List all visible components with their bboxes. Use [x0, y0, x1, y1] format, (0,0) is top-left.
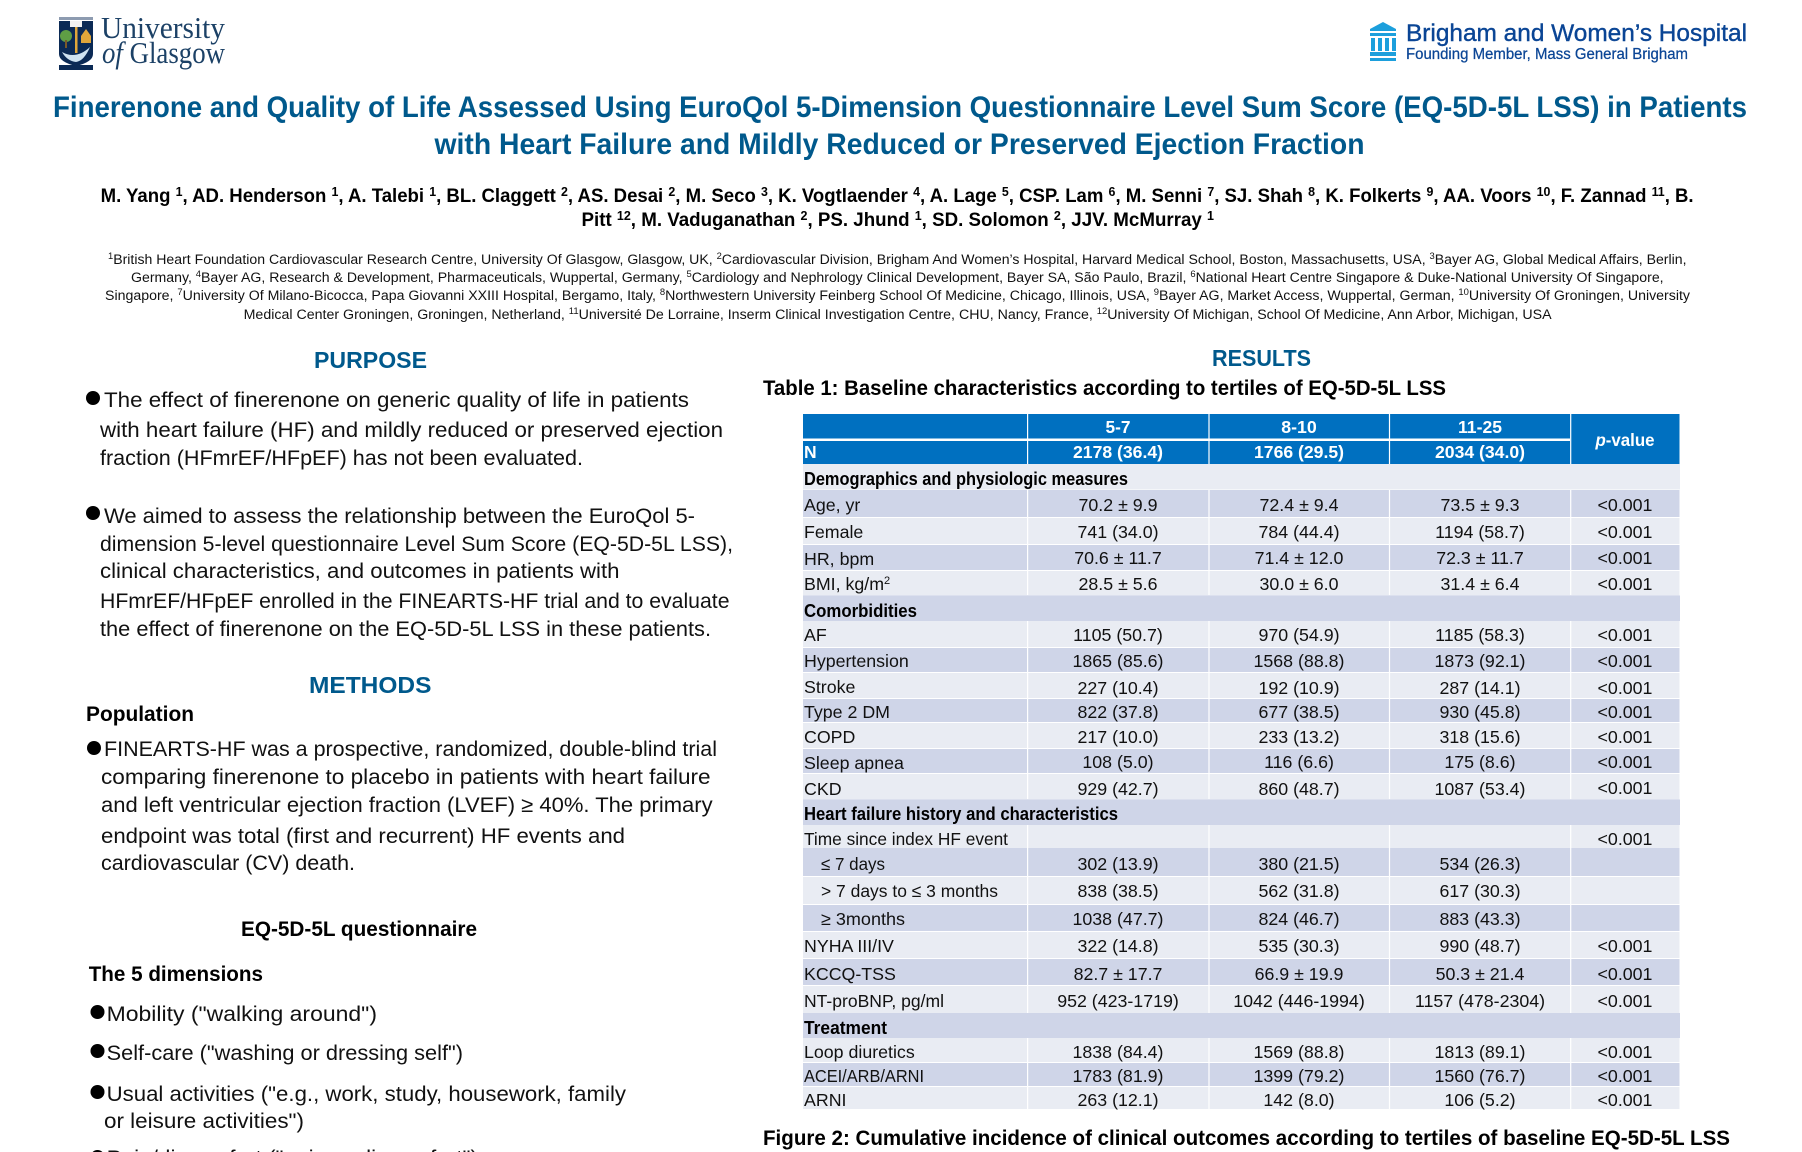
- subheading: the 5 dimensions: The 5 dimensions: [89, 963, 263, 986]
- table header: 1766 (29.5): [1254, 442, 1344, 462]
- affiliations: Université De Lorraine, Inserm Clinical Investigation Centre, CHU, Nancy, France,: [579, 307, 1097, 322]
- authors: M. Yang: [101, 185, 174, 207]
- section: comorbidities: <0.001: [1598, 625, 1653, 645]
- section: treatment: [804, 1018, 1653, 1110]
- section: heart failure history and characteristics: 838 (38.5): [1077, 881, 1159, 901]
- authors: , AD. Henderson: [183, 185, 331, 207]
- authors: 4: [913, 184, 921, 199]
- section: heart failure history and characteristics: ≤ 7 days: [821, 854, 885, 874]
- section: heart failure history and characteristics: 883 (43.3): [1439, 909, 1521, 929]
- authors: , SD. Solomon: [922, 209, 1054, 231]
- authors: 9: [1427, 184, 1433, 199]
- authors: [101, 184, 1694, 231]
- bullet: purpose 1: The effect of finerenone on generic quality of life in patients: [104, 388, 689, 412]
- affiliations: Northwestern University Feinberg School Of Medicine, Chicago, Illinois, USA,: [665, 288, 1154, 303]
- section: demographics and physiologic measures: <0.001: [1598, 548, 1653, 568]
- subheading: EQ-5D-5L questionnaire: EQ-5D-5L questionnaire: [241, 918, 477, 941]
- section: heart failure history and characteristics: NT-proBNP, pg/ml: [804, 991, 944, 1011]
- section: heart failure history and characteristics: Time since index HF event: [804, 829, 1008, 849]
- section: demographics and physiologic measures: <0.001: [1598, 495, 1653, 515]
- authors: 10: [1537, 184, 1550, 199]
- section: heart failure history and characteristics: 66.9 ± 19.9: [1255, 964, 1344, 984]
- logo: Brigham and Women's Hospital: [1370, 20, 1747, 63]
- affiliations: Germany,: [131, 270, 189, 285]
- section: demographics and physiologic measures: 31.4 ± 6.4: [1441, 574, 1520, 594]
- affiliations: 9: [1154, 287, 1159, 297]
- bullet: purpose 2: dimension 5-level questionnaire Level Sum Score (EQ-5D-5L LSS),: [100, 532, 733, 556]
- section: comorbidities: 822 (37.8): [1077, 702, 1159, 722]
- authors: , A. Talebi: [338, 185, 429, 207]
- table header: [803, 414, 1680, 464]
- authors: 6: [1109, 184, 1115, 199]
- authors: , M. Vaduganathan: [631, 209, 801, 231]
- subheading: population: Population: [86, 703, 194, 726]
- section: treatment: 142 (8.0): [1263, 1090, 1335, 1110]
- bullet: purpose 2: HFmrEF/HFpEF enrolled in the FINEARTS-HF trial and to evaluate: [100, 589, 730, 613]
- section: comorbidities: 227 (10.4): [1077, 678, 1159, 698]
- affiliations: National Heart Centre Singapore & Duke-National University Of Singapore,: [1196, 270, 1664, 285]
- section: treatment: 1560 (76.7): [1435, 1066, 1525, 1086]
- section: comorbidities: 287 (14.1): [1439, 678, 1521, 698]
- icon: hospital columns: [1370, 22, 1396, 61]
- section: heart failure history and characteristics: > 7 days to ≤ 3 months: [821, 881, 998, 901]
- table header: 8-10: [1281, 417, 1317, 437]
- section: treatment: 1813 (89.1): [1435, 1042, 1525, 1062]
- authors: , K. Vogtlaender: [768, 185, 913, 207]
- figure 2 caption: Figure 2: Cumulative incidence of clinical outcomes according to tertiles of baseline EQ-5D-5L LSS: [763, 1127, 1730, 1150]
- section: comorbidities: 1865 (85.6): [1073, 651, 1163, 671]
- section: heart failure history and characteristics: 1042 (446-1994): [1233, 991, 1365, 1011]
- section: treatment: 263 (12.1): [1077, 1090, 1159, 1110]
- authors: , SJ. Shah: [1214, 185, 1308, 207]
- section: treatment: 1569 (88.8): [1254, 1042, 1344, 1062]
- bullet: population: endpoint was total (first and recurrent) HF events and: [101, 824, 625, 848]
- table header: 5-7: [1106, 417, 1130, 437]
- section: demographics and physiologic measures: [804, 469, 1653, 594]
- section: comorbidities: <0.001: [1598, 778, 1653, 798]
- wordmark: University: [101, 10, 225, 45]
- table: baseline characteristics: [803, 414, 1680, 1110]
- title: with Heart Failure and Mildly Reduced or Preserved Ejection Fraction: [434, 128, 1364, 161]
- list: dimensions: Usual activities ("e.g., work, study, housework, family: [107, 1082, 626, 1106]
- bullet: population: cardiovascular (CV) death.: [101, 851, 355, 875]
- authors: 12: [617, 208, 631, 223]
- heading: methods: METHODS: [309, 672, 431, 698]
- authors: 8: [1308, 184, 1315, 199]
- section: comorbidities: Stroke: [804, 677, 856, 697]
- section: heart failure history and characteristics: 1157 (478-2304): [1415, 991, 1545, 1011]
- affiliations: 10: [1458, 287, 1469, 297]
- section: demographics and physiologic measures: Demographics and physiologic measures: [804, 469, 1128, 489]
- bullet: population: comparing finerenone to placebo in patients with heart failure: [101, 765, 711, 789]
- authors: , PS. Jhund: [807, 209, 915, 231]
- section: heart failure history and characteristics: NYHA III/IV: [804, 936, 894, 956]
- affiliations: [105, 251, 1690, 322]
- section: heart failure history and characteristics: <0.001: [1598, 936, 1653, 956]
- section: demographics and physiologic measures: 72.3 ± 11.7: [1436, 548, 1524, 568]
- heading: results: RESULTS: [1212, 345, 1311, 371]
- affiliations: Medical Center Groningen, Groningen, Netherland,: [244, 307, 549, 322]
- panel: purpose: [86, 347, 733, 641]
- authors: , M. Seco: [675, 185, 761, 207]
- row backgrounds: [803, 414, 1680, 1109]
- section: demographics and physiologic measures: 70.6 ± 11.7: [1074, 548, 1162, 568]
- section: heart failure history and characteristics: ≥ 3months: [821, 909, 905, 929]
- affiliations: University Of Milano-Bicocca, Papa Giovanni XXIII Hospital, Bergamo, Italy,: [183, 288, 660, 303]
- section: demographics and physiologic measures: 1194 (58.7): [1435, 522, 1525, 542]
- authors: , AS. Desai: [568, 185, 668, 207]
- section: comorbidities: Sleep apnea: [804, 753, 904, 773]
- section: comorbidities: 860 (48.7): [1258, 779, 1340, 799]
- section: demographics and physiologic measures: Female: [804, 522, 863, 542]
- table header: 11-25: [1458, 417, 1502, 437]
- section: demographics and physiologic measures: 784 (44.4): [1258, 522, 1340, 542]
- section: heart failure history and characteristics: <0.001: [1598, 964, 1653, 984]
- section: heart failure history and characteristics: <0.001: [1598, 991, 1653, 1011]
- authors: 11: [1652, 184, 1665, 199]
- section: demographics and physiologic measures: 28.5 ± 5.6: [1079, 574, 1158, 594]
- section: comorbidities: Type 2 DM: [804, 702, 890, 722]
- section: comorbidities: 930 (45.8): [1439, 702, 1521, 722]
- authors: 2: [1054, 208, 1061, 223]
- list: dimensions: Self-care ("washing or dressing self"): [107, 1041, 463, 1065]
- section: treatment: 1783 (81.9): [1073, 1066, 1163, 1086]
- authors: 1: [429, 184, 436, 199]
- section: comorbidities: 233 (13.2): [1258, 727, 1340, 747]
- section: treatment: <0.001: [1598, 1090, 1653, 1110]
- bullet: purpose 1: fraction (HFmrEF/HFpEF) has not been evaluated.: [100, 446, 583, 470]
- section: comorbidities: CKD: [804, 779, 842, 799]
- section: comorbidities: 1105 (50.7): [1073, 625, 1163, 645]
- section: comorbidities: 175 (8.6): [1444, 752, 1516, 772]
- section: heart failure history and characteristics: 322 (14.8): [1077, 936, 1159, 956]
- section: treatment: <0.001: [1598, 1066, 1653, 1086]
- section: heart failure history and characteristics: 990 (48.7): [1439, 936, 1521, 956]
- authors: , CSP. Lam: [1009, 185, 1109, 207]
- section: demographics and physiologic measures: Age, yr: [804, 495, 860, 515]
- section: heart failure history and characteristics: 82.7 ± 17.7: [1074, 964, 1162, 984]
- logo: University of Glasgow: of Glasgow: [102, 35, 226, 70]
- section: demographics and physiologic measures: BMI, kg/m: [804, 574, 884, 594]
- authors: 7: [1207, 184, 1214, 199]
- authors: , K. Folkerts: [1315, 185, 1427, 207]
- section: comorbidities: <0.001: [1598, 678, 1653, 698]
- section: comorbidities: 217 (10.0): [1077, 727, 1159, 747]
- title: [53, 91, 1747, 161]
- affiliations: Bayer AG, Research & Development, Pharmaceuticals, Wuppertal, Germany,: [201, 270, 687, 285]
- bullet: purpose 2: clinical characteristics, and outcomes in patients with: [100, 559, 620, 583]
- section: heart failure history and characteristics: 1038 (47.7): [1073, 909, 1163, 929]
- authors: 1: [915, 208, 922, 223]
- section: comorbidities: <0.001: [1598, 651, 1653, 671]
- section: treatment: ACEI/ARB/ARNI: [804, 1066, 924, 1086]
- section: comorbidities: Hypertension: [804, 651, 909, 671]
- section: treatment: <0.001: [1598, 1042, 1653, 1062]
- section: heart failure history and characteristics: [804, 804, 1653, 1011]
- section: heart failure history and characteristics: 562 (31.8): [1258, 881, 1340, 901]
- panel: methods: [86, 672, 717, 1152]
- panel: results: [763, 345, 1730, 1150]
- authors: 5: [1002, 184, 1009, 199]
- section: demographics and physiologic measures: 2: [884, 575, 890, 587]
- section: heart failure history and characteristics: 302 (13.9): [1077, 854, 1159, 874]
- bullet: population: [87, 737, 717, 875]
- bullet: purpose 1: [86, 388, 723, 470]
- section: treatment: 1399 (79.2): [1254, 1066, 1344, 1086]
- section: treatment: ARNI: [804, 1090, 846, 1110]
- section: heart failure history and characteristics: Heart failure history and characteristics: [804, 804, 1118, 824]
- section: demographics and physiologic measures: <0.001: [1598, 574, 1653, 594]
- affiliations: 8: [660, 287, 665, 297]
- affiliations: 4: [196, 269, 201, 279]
- logo: Brigham and Women's Hospital: Founding Member, Mass General Brigham: [1406, 46, 1688, 63]
- authors: , F. Zannad: [1550, 185, 1652, 207]
- section: demographics and physiologic measures: 30.0 ± 6.0: [1260, 574, 1339, 594]
- heading: purpose: PURPOSE: [314, 347, 427, 373]
- table header: N: [804, 442, 817, 462]
- authors: , M. Senni: [1115, 185, 1207, 207]
- section: heart failure history and characteristics: 535 (30.3): [1258, 936, 1340, 956]
- section: comorbidities: <0.001: [1598, 702, 1653, 722]
- section: heart failure history and characteristics: 50.3 ± 21.4: [1436, 964, 1525, 984]
- section: treatment: Treatment: [804, 1018, 887, 1038]
- bullet: population: and left ventricular ejection fraction (LVEF) ≥ 40%. The primary: [101, 793, 713, 817]
- section: comorbidities: [804, 601, 1653, 799]
- authors: , JJV. McMurray: [1061, 209, 1207, 231]
- section: comorbidities: <0.001: [1598, 727, 1653, 747]
- table header: 2178 (36.4): [1073, 442, 1163, 462]
- section: treatment: Loop diuretics: [804, 1042, 915, 1062]
- table title: Table 1: Baseline characteristics according to tertiles of EQ-5D-5L LSS: [763, 377, 1446, 400]
- section: comorbidities: 1568 (88.8): [1254, 651, 1344, 671]
- authors: 1: [331, 184, 338, 199]
- bullet: purpose 1: with heart failure (HF) and mildly reduced or preserved ejection: [99, 418, 723, 442]
- affiliations: 11: [569, 306, 579, 316]
- affiliations: 1: [108, 251, 113, 261]
- section: heart failure history and characteristics: 824 (46.7): [1258, 909, 1340, 929]
- affiliations: University Of Groningen, University: [1469, 288, 1690, 303]
- affiliations: 2: [717, 251, 722, 261]
- section: demographics and physiologic measures: <0.001: [1598, 522, 1653, 542]
- table header: 2034 (34.0): [1435, 442, 1525, 462]
- section: heart failure history and characteristics: 380 (21.5): [1258, 854, 1340, 874]
- section: comorbidities: 1185 (58.3): [1435, 625, 1525, 645]
- section: comorbidities: 1873 (92.1): [1435, 651, 1525, 671]
- authors: 1: [176, 184, 183, 199]
- authors: 3: [761, 184, 768, 199]
- bullet: purpose 2: We aimed to assess the relationship between the EuroQol 5-: [104, 504, 695, 528]
- list: dimensions: or leisure activities"): [104, 1109, 304, 1133]
- affiliations: Singapore,: [105, 288, 170, 303]
- section: demographics and physiologic measures: HR, bpm: [804, 549, 874, 569]
- list: dimensions: Mobility ("walking around"): [107, 1002, 377, 1026]
- table header: p-value: [1595, 430, 1655, 450]
- section: demographics and physiologic measures: 73.5 ± 9.3: [1441, 495, 1520, 515]
- authors: , BL. Claggett: [436, 185, 561, 207]
- section: comorbidities: <0.001: [1598, 752, 1653, 772]
- section: comorbidities: COPD: [804, 727, 855, 747]
- section: comorbidities: AF: [804, 625, 827, 645]
- section: heart failure history and characteristics: <0.001: [1598, 829, 1653, 849]
- section: comorbidities: 116 (6.6): [1264, 752, 1334, 772]
- bullet: purpose 2: [86, 504, 733, 641]
- affiliations: Cardiology and Nephrology Clinical Development, Bayer SA, São Paulo, Brazil,: [692, 270, 1190, 285]
- authors: , B.: [1665, 185, 1694, 207]
- section: comorbidities: 929 (42.7): [1077, 779, 1159, 799]
- affiliations: Cardiovascular Division, Brigham And Women’s Hospital, Harvard Medical School, Boston, Massachusetts, USA,: [722, 252, 1430, 267]
- section: comorbidities: 1087 (53.4): [1435, 779, 1525, 799]
- affiliations: 3: [1430, 251, 1435, 261]
- bullet: purpose 2: the effect of finerenone on the EQ-5D-5L LSS in these patients.: [100, 617, 711, 641]
- section: treatment: 106 (5.2): [1444, 1090, 1516, 1110]
- section: comorbidities: 108 (5.0): [1082, 752, 1154, 772]
- authors: , A. Lage: [920, 185, 1002, 207]
- affiliations: Bayer AG, Global Medical Affairs, Berlin,: [1435, 252, 1686, 267]
- affiliations: British Heart Foundation Cardiovascular Research Centre, University Of Glasgow, Glasgow, UK,: [113, 252, 717, 267]
- authors: , AA. Voors: [1433, 185, 1537, 207]
- affiliations: University Of Michigan, School Of Medicine, Ann Arbor, Michigan, USA: [1107, 307, 1552, 322]
- list: dimensions: [90, 1002, 626, 1152]
- authors: 1: [1207, 208, 1214, 223]
- authors: 2: [668, 184, 675, 199]
- logo: University of Glasgow: [59, 10, 226, 70]
- authors: 2: [561, 184, 568, 199]
- affiliations: 12: [1097, 306, 1107, 316]
- affiliations: 6: [1190, 269, 1196, 279]
- section: demographics and physiologic measures: 70.2 ± 9.9: [1079, 495, 1158, 515]
- affiliations: 5: [687, 269, 692, 279]
- section: heart failure history and characteristics: 617 (30.3): [1439, 881, 1521, 901]
- section: demographics and physiologic measures: 741 (34.0): [1077, 522, 1159, 542]
- wordmark: Brigham and Women’s Hospital: [1406, 20, 1747, 47]
- affiliations: Bayer AG, Market Access, Wuppertal, German,: [1159, 288, 1458, 303]
- authors: 2: [801, 208, 807, 223]
- section: comorbidities: 677 (38.5): [1258, 702, 1340, 722]
- section: demographics and physiologic measures: 72.4 ± 9.4: [1260, 495, 1339, 515]
- icon: university crest: [59, 17, 93, 70]
- section: comorbidities: 318 (15.6): [1439, 727, 1521, 747]
- section: comorbidities: Comorbidities: [804, 601, 917, 621]
- section: treatment: 1838 (84.4): [1073, 1042, 1163, 1062]
- section: demographics and physiologic measures: 71.4 ± 12.0: [1255, 548, 1344, 568]
- section: heart failure history and characteristics: 534 (26.3): [1439, 854, 1521, 874]
- authors: Pitt: [582, 209, 613, 231]
- section: comorbidities: 970 (54.9): [1258, 625, 1340, 645]
- affiliations: 7: [177, 287, 183, 297]
- bullet: population: FINEARTS-HF was a prospective, randomized, double-blind trial: [104, 737, 717, 761]
- section: comorbidities: 192 (10.9): [1258, 678, 1340, 698]
- section: heart failure history and characteristics: 952 (423-1719): [1057, 991, 1179, 1011]
- section: heart failure history and characteristics: KCCQ-TSS: [804, 964, 896, 984]
